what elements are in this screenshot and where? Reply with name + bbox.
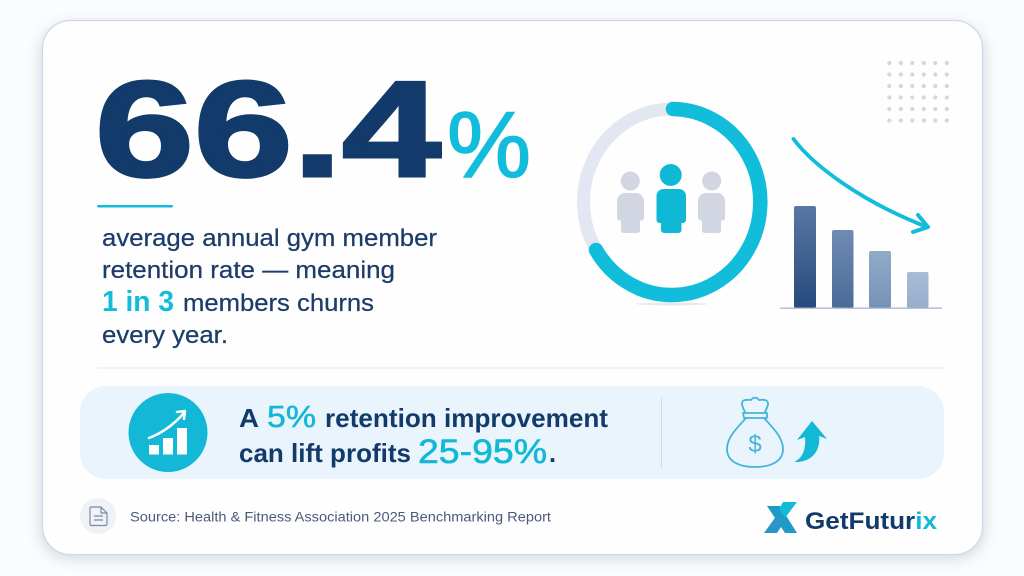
description text: retention rate — meaning — [102, 257, 395, 284]
logo: GetFuturix — [764, 502, 938, 535]
declining bar chart — [780, 206, 942, 309]
icon: money bag — [727, 398, 783, 467]
icon: up arrow — [794, 421, 827, 462]
description text: average annual gym member — [102, 225, 437, 252]
description text: members churns — [183, 290, 374, 317]
panel divider — [661, 398, 662, 468]
callout text: A — [239, 403, 259, 433]
people icons — [617, 164, 725, 233]
downward trend arrow — [794, 139, 928, 232]
icon: money bag: $ — [748, 431, 762, 458]
description text — [102, 225, 437, 349]
accent underline — [97, 205, 173, 208]
donut ring: retention — [584, 109, 760, 306]
divider — [97, 368, 944, 369]
icon: source document — [80, 498, 116, 534]
decorative dot grid — [887, 61, 949, 123]
icon: growth chart circle — [128, 393, 208, 472]
logo mark — [764, 502, 797, 533]
headline statistic: 66.4 — [95, 53, 441, 205]
callout text: can lift profits — [239, 438, 411, 468]
callout text: . — [549, 438, 556, 468]
logo wordmark: GetFutur ix — [805, 508, 938, 535]
source text: Source: Health & Fitness Association 2025 Benchmarking Report — [130, 510, 551, 524]
description text: every year. — [102, 322, 228, 349]
callout panel — [80, 386, 944, 479]
callout text: retention improvement — [325, 403, 608, 433]
callout text: 5% — [267, 399, 316, 434]
description text: 1 in 3 — [102, 286, 174, 318]
headline statistic: % — [447, 92, 531, 197]
headline statistic — [95, 53, 531, 205]
callout text — [239, 399, 608, 471]
callout text: 25-95% — [418, 433, 547, 471]
